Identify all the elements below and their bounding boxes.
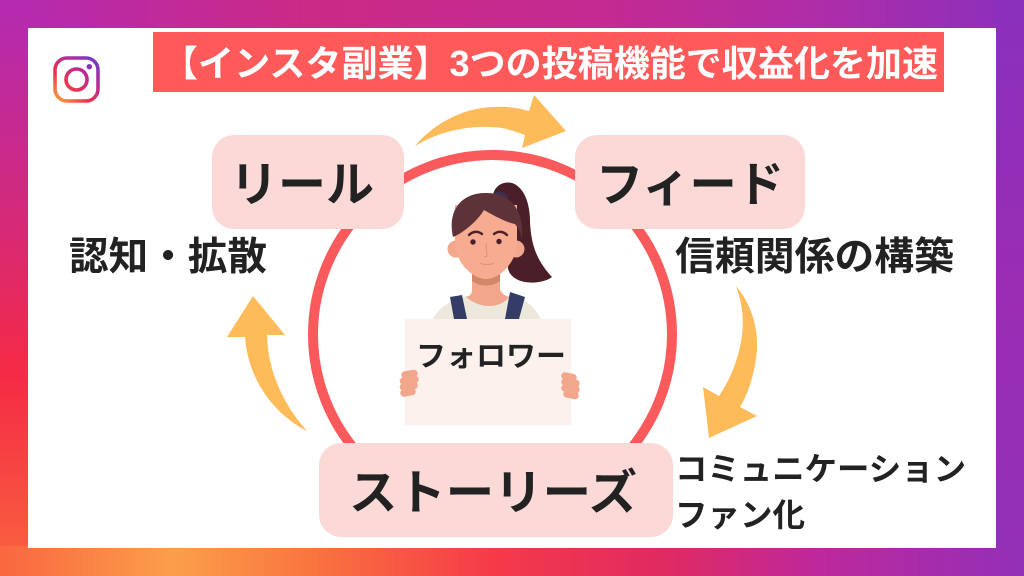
cycle ring xyxy=(313,155,672,514)
overall straps xyxy=(450,292,525,319)
label box: ストーリーズ xyxy=(319,443,673,537)
title banner: 【インスタ副業】3つの投稿機能で収益化を加速 xyxy=(162,43,938,84)
right hand fingers xyxy=(565,376,576,396)
eyes xyxy=(470,239,476,245)
left hand fingers xyxy=(404,374,415,393)
neck xyxy=(466,270,509,306)
label box: リール: リール xyxy=(230,159,374,212)
nose and smile xyxy=(480,243,494,264)
ponytail xyxy=(493,182,552,283)
label box: フィード xyxy=(575,135,805,229)
illustration: woman holding follower sign xyxy=(404,182,576,425)
hair tie xyxy=(493,192,508,203)
text: コミュニケーション ファン化: コミュニケーション xyxy=(675,451,966,487)
neck shadow xyxy=(472,274,500,286)
text: コミュニケーション ファン化 xyxy=(675,451,966,533)
brows xyxy=(469,232,507,235)
shirt xyxy=(433,296,541,319)
sign text: フォロワー xyxy=(416,341,566,373)
ears xyxy=(448,240,464,258)
label box: フィード: フィード xyxy=(596,159,784,212)
arrow: リール to フィード xyxy=(415,95,566,148)
arrow: フィード to ストーリーズ xyxy=(703,286,757,438)
icon: instagram logo xyxy=(55,58,98,101)
title banner xyxy=(153,32,944,92)
text: コミュニケーション ファン化: ファン化 xyxy=(675,497,805,533)
hair xyxy=(452,193,522,240)
sign board xyxy=(405,319,571,425)
label box: リール xyxy=(212,135,404,229)
label box: ストーリーズ: ストーリーズ xyxy=(349,467,637,520)
text: 認知・拡散: 認知・拡散 xyxy=(69,236,267,279)
face xyxy=(455,205,517,279)
arrow: ストーリーズ to リール xyxy=(227,296,307,431)
text: 信頼関係の構築: 信頼関係の構築 xyxy=(675,236,954,279)
